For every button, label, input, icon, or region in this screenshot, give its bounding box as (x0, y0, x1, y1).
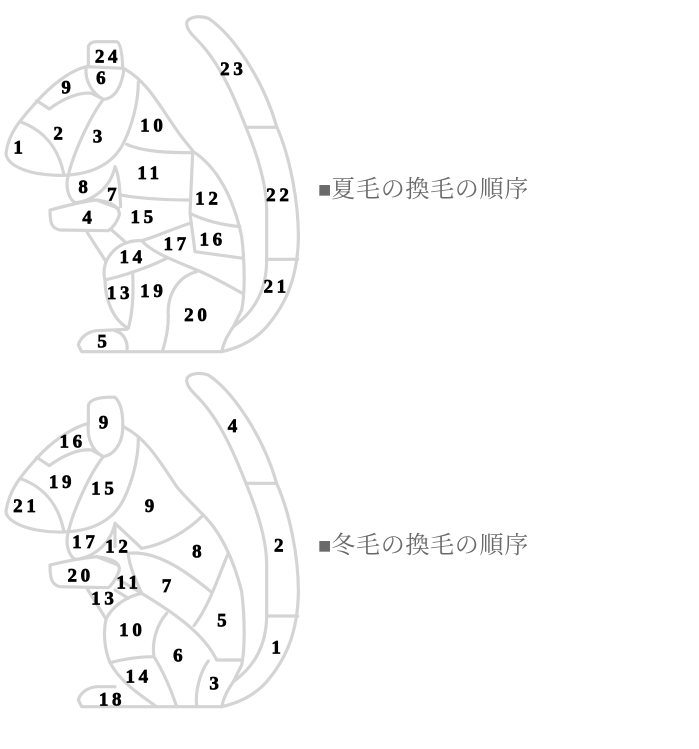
numbers: winter regions: 4 (228, 416, 241, 437)
outline: winter regions (6, 373, 298, 707)
diagram: summer moult squirrel (6, 17, 298, 353)
numbers: summer regions: 19 (140, 281, 166, 302)
numbers: winter regions: 16 (60, 432, 86, 453)
diagram: winter moult squirrel (6, 373, 298, 710)
numbers: winter regions: 3 (209, 673, 223, 694)
numbers: summer regions: 10 (140, 116, 166, 137)
numbers: winter regions: 8 (192, 542, 205, 563)
caption: summer moult order: ■夏毛の換毛の順序 (318, 176, 529, 203)
numbers: summer regions: 12 (195, 188, 221, 209)
numbers: winter regions: 9 (145, 496, 158, 517)
numbers: winter regions: 14 (126, 666, 152, 687)
numbers: summer regions: 16 (200, 230, 226, 251)
numbers: winter regions: 12 (105, 537, 131, 558)
numbers: summer regions: 21 (263, 276, 290, 297)
numbers: winter regions: 6 (173, 645, 186, 666)
numbers: winter regions: 11 (116, 573, 142, 594)
numbers: summer regions: 8 (78, 177, 92, 198)
caption: winter moult order: ■冬毛の換毛の順序 (318, 532, 529, 559)
numbers: summer regions: 15 (131, 207, 157, 228)
numbers: summer regions: 11 (137, 163, 163, 184)
numbers: summer regions: 22 (266, 185, 292, 206)
numbers: winter regions: 7 (162, 576, 175, 597)
numbers: winter regions: 2 (274, 535, 287, 556)
numbers: winter regions: 9 (99, 412, 112, 433)
numbers: summer regions: 20 (184, 305, 210, 326)
numbers: winter regions: 17 (72, 532, 98, 553)
numbers: summer regions: 2 (53, 124, 67, 145)
numbers: winter regions: 1 (271, 637, 285, 658)
numbers: winter regions: 21 (13, 496, 39, 517)
numbers: summer regions: 24 (95, 46, 121, 67)
numbers: summer regions: 4 (82, 208, 96, 229)
numbers: summer regions: 14 (120, 247, 146, 268)
numbers: winter regions: 20 (68, 565, 94, 586)
numbers: summer regions (13, 46, 292, 353)
outline: summer regions (6, 17, 298, 352)
numbers: summer regions: 9 (61, 78, 75, 99)
numbers: summer regions: 23 (220, 59, 246, 80)
numbers: summer regions: 1 (13, 138, 27, 159)
numbers: winter regions: 5 (217, 611, 230, 632)
numbers: winter regions: 19 (49, 472, 75, 493)
numbers: summer regions: 6 (96, 68, 109, 89)
numbers: summer regions: 17 (164, 234, 190, 255)
numbers: summer regions: 5 (97, 332, 111, 353)
numbers: winter regions: 18 (99, 689, 125, 710)
numbers: summer regions: 3 (93, 126, 106, 147)
numbers: winter regions: 15 (91, 479, 117, 500)
numbers: winter regions: 10 (119, 620, 145, 641)
numbers: summer regions: 13 (107, 283, 133, 304)
numbers: winter regions: 13 (91, 589, 117, 610)
numbers: winter regions (13, 412, 287, 710)
numbers: summer regions: 7 (107, 185, 120, 206)
